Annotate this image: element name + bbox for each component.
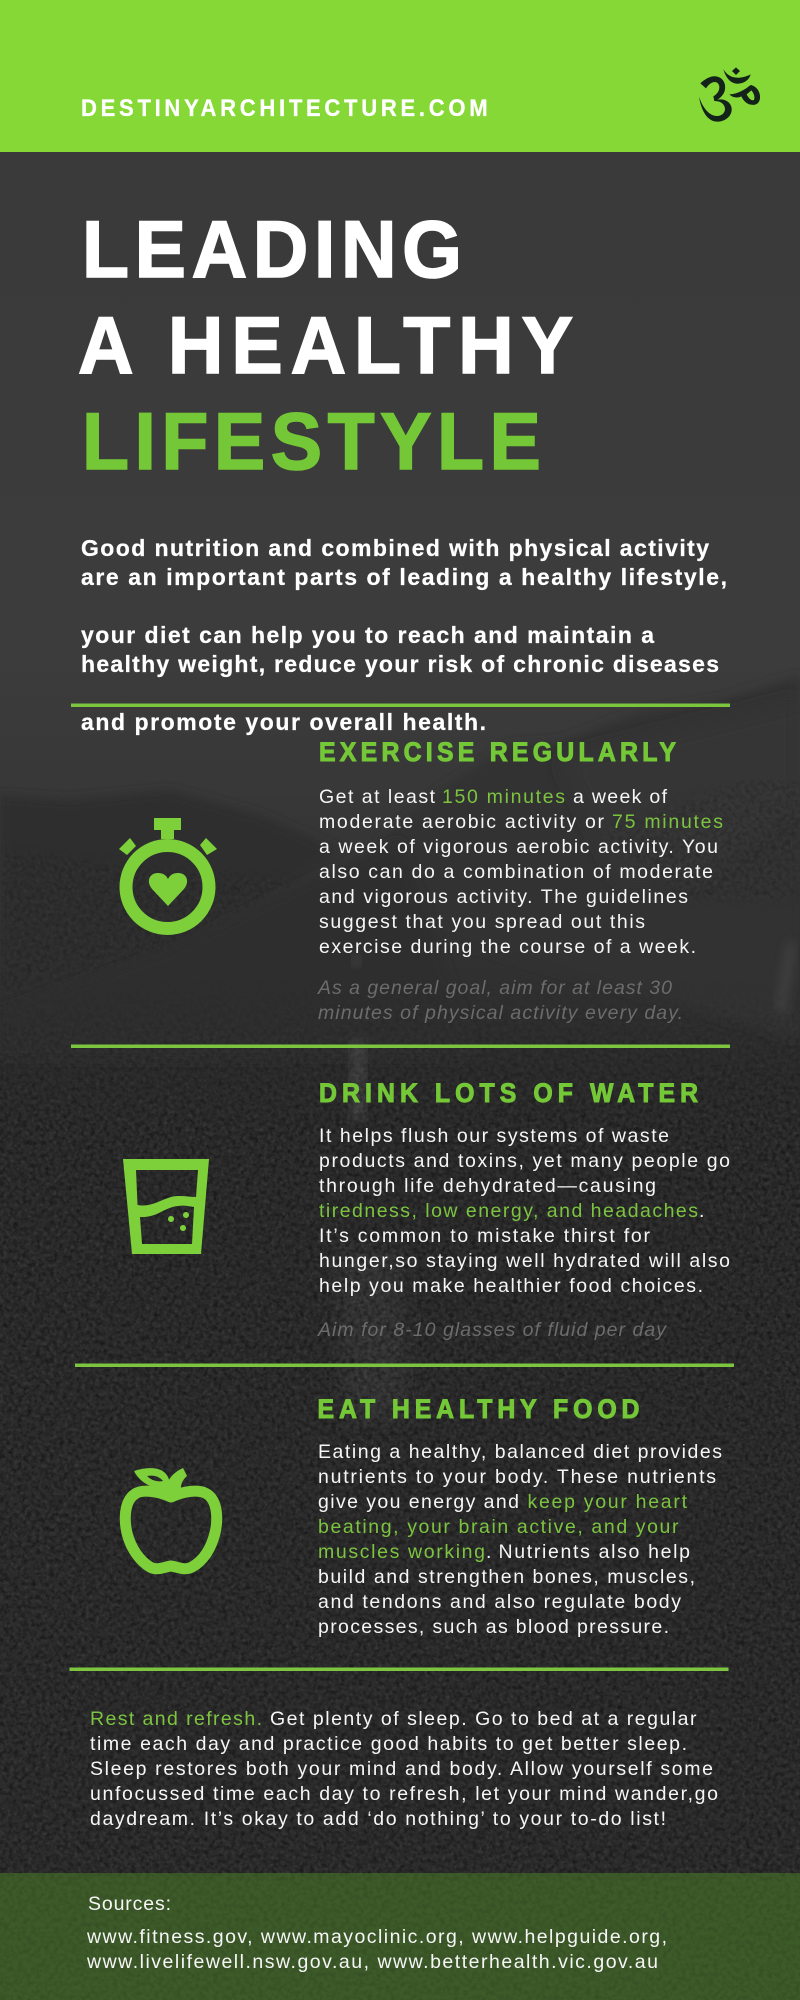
body text: and tendons and also regulate body <box>318 1591 681 1613</box>
body text: Nutrients also help <box>498 1541 690 1563</box>
rest and refresh text: time each day and practice good habits to get better sleep. <box>90 1733 687 1755</box>
body text: products and toxins, yet many people go <box>319 1150 730 1172</box>
rest and refresh text: daydream. It’s okay to add ‘do nothing’ to your to-do list! <box>90 1808 666 1830</box>
body text: Eating a healthy, balanced diet provides <box>318 1441 722 1463</box>
body text: hunger,so staying well hydrated will also <box>319 1250 730 1272</box>
body text: tiredness, low energy, and headaches <box>319 1200 698 1222</box>
body text: processes, such as blood pressure. <box>318 1616 669 1638</box>
intro text: are an important parts of leading a healthy lifestyle, <box>81 564 727 590</box>
heading: EAT HEALTHY FOOD <box>318 1395 639 1424</box>
body text <box>318 1441 722 1638</box>
title: LEADING <box>82 203 462 294</box>
body text: give you energy and <box>318 1491 519 1513</box>
source links: www.fitness.gov, www.mayoclinic.org, www.helpguide.org, <box>86 1926 667 1948</box>
body text: keep your heart <box>528 1491 688 1513</box>
panel: eat healthy food <box>125 1395 722 1638</box>
body text <box>319 786 723 958</box>
body text: It helps flush our systems of waste <box>319 1125 669 1147</box>
body text: . <box>699 1200 704 1222</box>
body text: a week of <box>573 786 668 808</box>
sources label: Sources: <box>88 1893 171 1915</box>
title: LIFESTYLE <box>82 395 541 486</box>
icon: apple <box>125 1468 217 1569</box>
site name: DESTINYARCHITECTURE.COM <box>81 94 488 121</box>
body text: also can do a combination of moderate <box>319 861 713 883</box>
italic goal note: minutes of physical activity every day. <box>318 1002 683 1024</box>
icon: stopwatch with heart <box>119 818 217 928</box>
intro text: your diet can help you to reach and maintain a <box>81 622 654 648</box>
rest and refresh text: unfocussed time each day to refresh, let your mind wander,go <box>90 1783 718 1805</box>
intro text: and promote your overall health. <box>81 709 486 735</box>
body text: suggest that you spread out this <box>319 911 645 933</box>
body text: 150 minutes <box>442 786 565 808</box>
heading: EXERCISE REGULARLY <box>319 738 676 767</box>
body text: a week of vigorous aerobic activity. You <box>319 836 718 858</box>
panel: drink lots of water <box>123 1079 730 1341</box>
italic goal note <box>317 977 683 1024</box>
intro text: Good nutrition and combined with physical activity <box>81 535 709 561</box>
rest and refresh text <box>90 1708 718 1830</box>
rest and refresh text: Get plenty of sleep. Go to bed at a regular <box>270 1708 697 1730</box>
title: A HEALTHY <box>78 299 573 390</box>
body text: moderate aerobic activity or <box>319 811 604 833</box>
body text: build and strengthen bones, muscles, <box>318 1566 695 1588</box>
body text: nutrients to your body. These nutrients <box>318 1466 716 1488</box>
body text: Get at least <box>319 786 436 808</box>
body text: exercise during the course of a week. <box>319 936 696 958</box>
icon: glass of water <box>123 1159 209 1254</box>
source links <box>86 1926 667 1973</box>
footer band: sources <box>0 1873 800 2000</box>
title <box>78 203 573 486</box>
intro text: healthy weight, reduce your risk of chronic diseases <box>81 651 719 677</box>
body text: 75 minutes <box>612 811 723 833</box>
body text: muscles working <box>318 1541 485 1563</box>
body text: through life dehydrated—causing <box>319 1175 656 1197</box>
body text: It’s common to mistake thirst for <box>319 1225 650 1247</box>
body text: help you make healthier food choices. <box>319 1275 703 1297</box>
intro text <box>81 535 727 735</box>
body text <box>319 1125 730 1297</box>
icon: om symbol <box>699 67 760 122</box>
source links: www.livelifewell.nsw.gov.au, www.betterhealth.vic.gov.au <box>86 1951 658 1973</box>
body text: beating, your brain active, and your <box>318 1516 679 1538</box>
body text: and vigorous activity. The guidelines <box>319 886 688 908</box>
body text: . <box>486 1541 491 1563</box>
heading: DRINK LOTS OF WATER <box>319 1079 698 1108</box>
rest and refresh text: Rest and refresh. <box>90 1708 262 1730</box>
italic goal note: As a general goal, aim for at least 30 <box>317 977 672 999</box>
panel: exercise regularly <box>119 738 723 1024</box>
rest and refresh text: Sleep restores both your mind and body. Allow yourself some <box>90 1758 713 1780</box>
header band <box>0 0 800 152</box>
italic hydration note: Aim for 8-10 glasses of fluid per day <box>317 1319 667 1341</box>
